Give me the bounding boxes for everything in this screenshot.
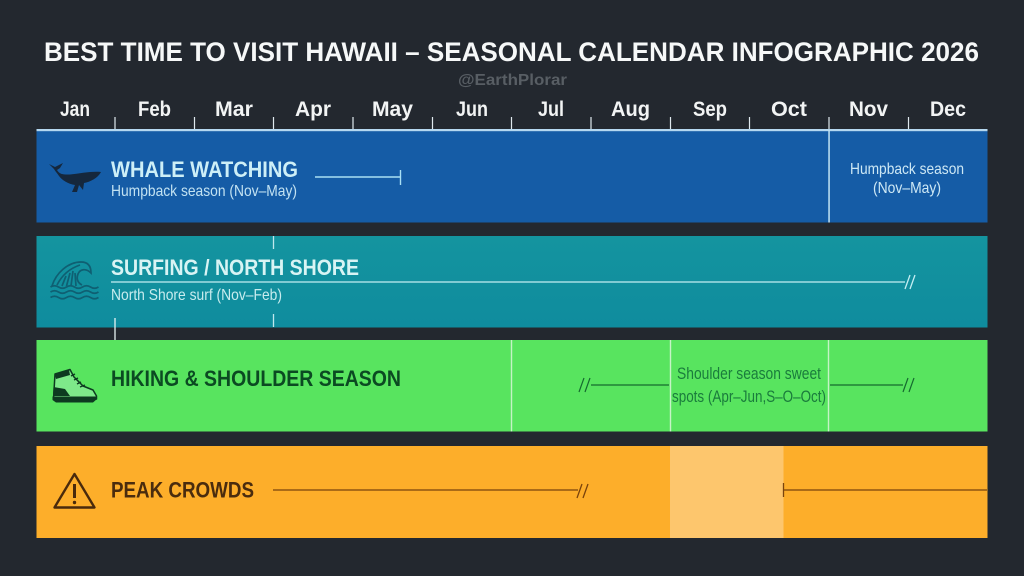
month axis: Apr <box>295 98 331 121</box>
tick: Feb <box>114 318 116 340</box>
text: humpback season right: (Nov–May) <box>873 180 941 197</box>
title: BEST TIME TO VISIT HAWAII – SEASONAL CALENDAR INFOGRAPHIC 2026 <box>44 37 979 67</box>
text: humpback season right <box>850 161 964 197</box>
heading: whale watching: WHALE WATCHING <box>111 157 298 182</box>
bracket line: right <box>830 378 914 392</box>
month axis: Feb <box>138 98 171 121</box>
month axis: Nov <box>849 98 888 121</box>
text: shoulder season: Shoulder season sweet <box>677 365 821 383</box>
icon: whale <box>49 163 101 192</box>
month axis: Oct <box>771 98 807 121</box>
watermark: @EarthPlorar <box>458 72 567 89</box>
month axis <box>60 98 966 130</box>
month axis: Dec <box>930 98 966 121</box>
bracket line: whale <box>315 170 400 185</box>
bracket line: right <box>783 483 987 497</box>
highlight block <box>670 446 784 538</box>
month axis: Sep <box>693 98 727 121</box>
text: humpback season right: Humpback season <box>850 161 964 178</box>
icon: boot <box>52 370 97 402</box>
heading: hiking: HIKING & SHOULDER SEASON <box>111 366 401 391</box>
bracket line: left <box>273 484 588 498</box>
month divider: Nov <box>828 130 830 222</box>
panel: hiking and shoulder season <box>36 340 988 432</box>
panel: whale watching <box>36 129 988 222</box>
heading: peak crowds: PEAK CROWDS <box>111 478 254 502</box>
panel: peak crowds <box>36 446 988 538</box>
bracket line: surfing <box>111 275 915 289</box>
text: shoulder season <box>672 365 826 406</box>
month axis: May <box>372 98 413 121</box>
text: humpback season left: Humpback season (Nov–May) <box>111 183 297 200</box>
text: shoulder season: spots (Apr–Jun,S–O–Oct) <box>672 388 826 406</box>
text: north shore surf: North Shore surf (Nov–Feb) <box>111 287 282 304</box>
month axis: Jan <box>60 98 90 121</box>
heading: surfing: SURFING / NORTH SHORE <box>111 255 359 280</box>
month axis: Mar <box>215 98 253 121</box>
icon: wave <box>50 262 98 299</box>
ticks: Mar <box>272 236 274 327</box>
month axis: Jun <box>456 98 488 121</box>
month dividers <box>512 340 828 432</box>
month axis: Aug <box>611 98 650 121</box>
bracket line: left <box>579 378 669 392</box>
panel: surfing <box>36 236 988 340</box>
month axis: Jul <box>538 98 564 121</box>
icon: warning <box>54 474 94 508</box>
